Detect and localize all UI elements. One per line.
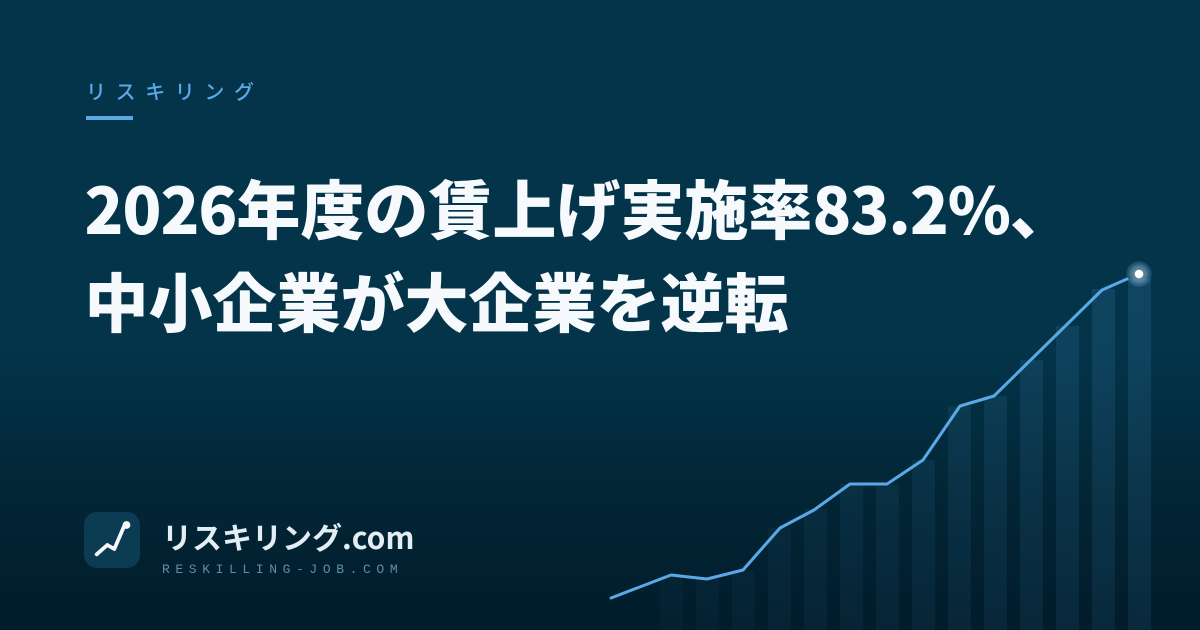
eyebrow category label: リスキリング bbox=[86, 76, 264, 105]
trend line bbox=[611, 279, 1127, 598]
brand name: リスキリング.com bbox=[162, 514, 414, 558]
title bbox=[84, 161, 1074, 346]
end point marker bbox=[1126, 261, 1152, 287]
title: 2026年度の賃上げ実施率83.2%、 bbox=[84, 161, 1074, 253]
eyebrow underline bbox=[86, 116, 133, 120]
brand url: RESKILLING-JOB.COM bbox=[162, 562, 403, 577]
icon: logo tile with rising line bbox=[84, 512, 140, 568]
bars bbox=[660, 279, 1151, 630]
title: 中小企業が大企業を逆転 bbox=[84, 254, 788, 346]
